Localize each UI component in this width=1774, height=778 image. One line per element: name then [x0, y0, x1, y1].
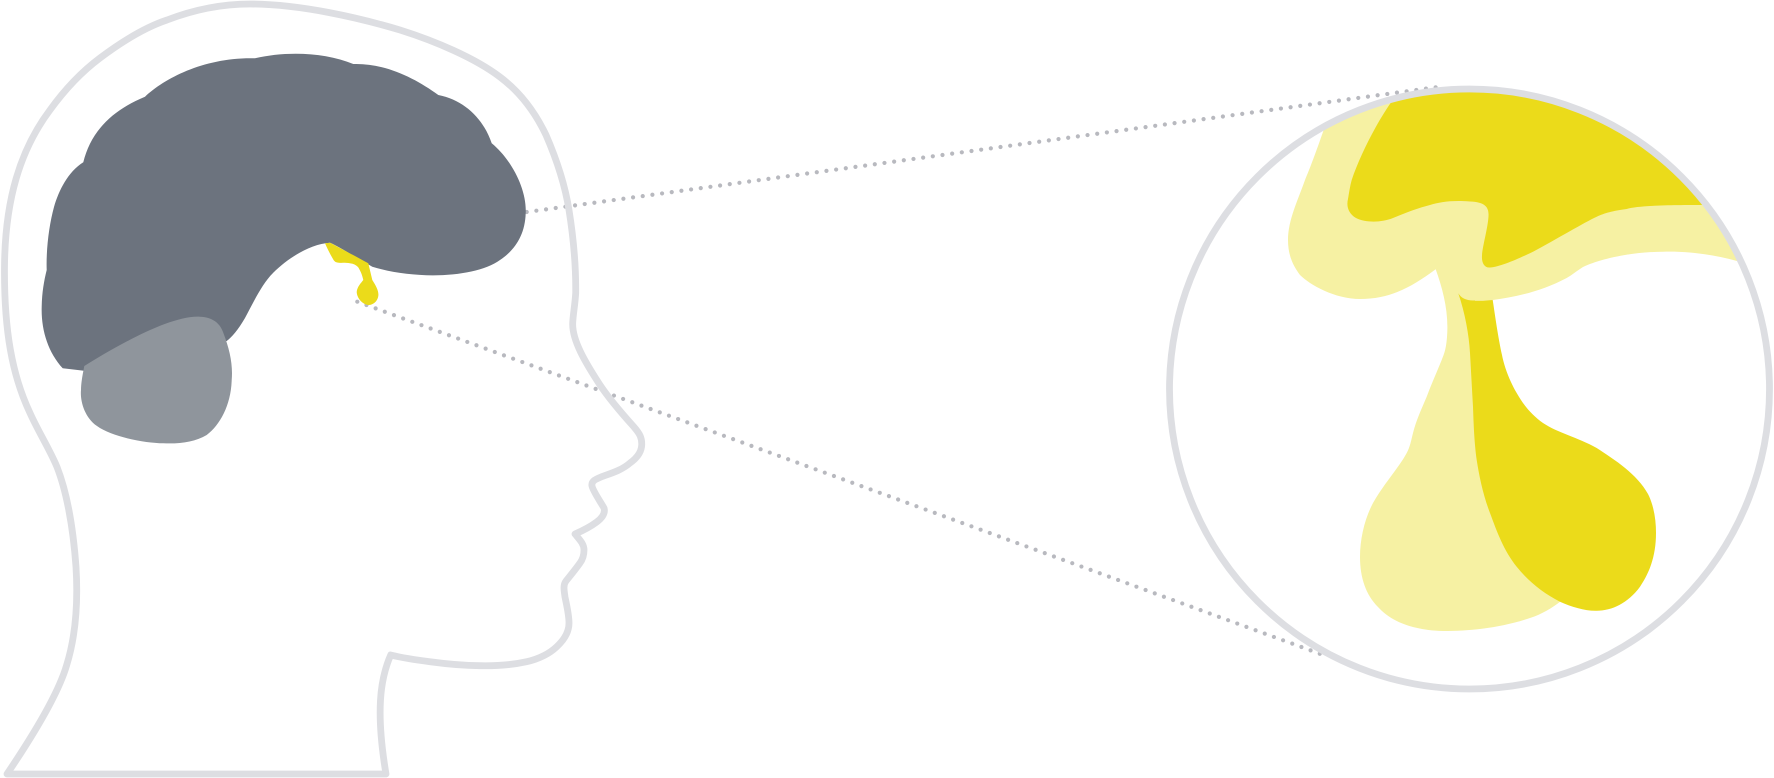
pale tissue	[1288, 103, 1737, 631]
dotted zoom lines	[357, 87, 1438, 656]
magnified view circle	[1170, 50, 1774, 689]
brain	[42, 54, 526, 371]
head outline	[4, 4, 642, 774]
bright stalk and lower lobe	[1458, 293, 1656, 611]
bright upper lobe	[1347, 92, 1702, 268]
pituitary gland in head	[325, 243, 378, 305]
grey lobe: cerebellum	[81, 317, 232, 443]
